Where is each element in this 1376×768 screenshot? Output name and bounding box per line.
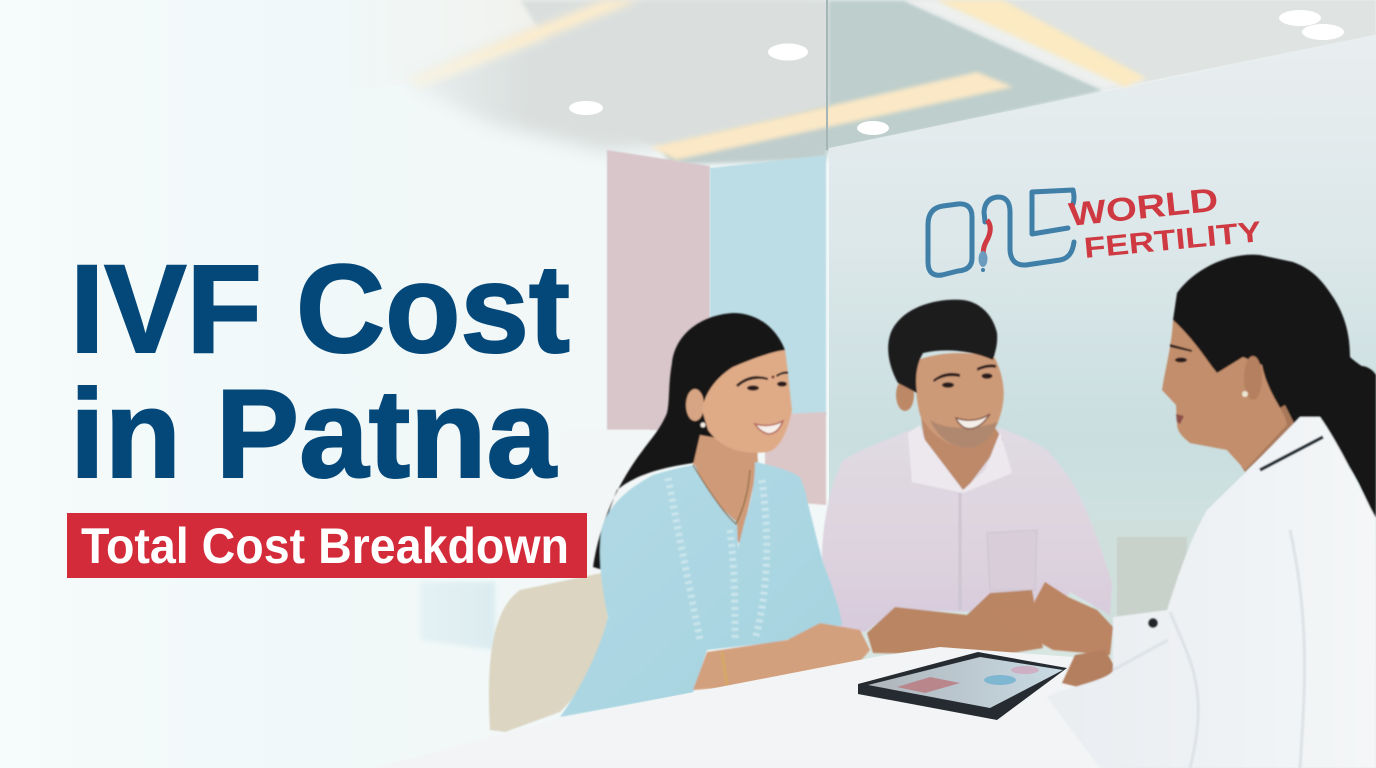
woman neck bbox=[693, 435, 758, 545]
doctor ear bbox=[1244, 356, 1262, 400]
doctor hair bbox=[1173, 255, 1376, 517]
doctor face bbox=[1162, 320, 1287, 470]
man forearms bbox=[867, 590, 1043, 655]
man face bbox=[916, 353, 1004, 448]
doctor eye bbox=[1170, 344, 1192, 362]
woman earring bbox=[700, 422, 706, 428]
woman smile bbox=[755, 421, 783, 434]
doctor lower hand bbox=[1062, 650, 1118, 690]
man ear bbox=[896, 379, 914, 411]
woman necklace bbox=[693, 465, 750, 524]
title: in Patna: in Patna bbox=[70, 365, 557, 504]
doctor mouth bbox=[1176, 414, 1184, 424]
logo icon: sperm and DNA bbox=[978, 220, 990, 272]
woman ear bbox=[686, 389, 704, 421]
doctor earring bbox=[1242, 391, 1248, 397]
man neck bbox=[920, 410, 1003, 493]
man beard shade bbox=[930, 420, 998, 448]
doctor neck bbox=[1225, 405, 1295, 472]
logo text: FERTILITY: FERTILITY bbox=[1083, 216, 1263, 265]
subtitle banner bbox=[67, 513, 587, 578]
man hair bbox=[888, 300, 997, 393]
doctor pen bbox=[1148, 618, 1158, 628]
doctor bbox=[988, 255, 1376, 768]
woman kurta embroidery bands bbox=[668, 478, 767, 640]
doctor coat folds bbox=[1113, 530, 1304, 768]
woman bracelet bbox=[722, 652, 727, 685]
woman bbox=[560, 313, 870, 717]
woman face bbox=[702, 350, 792, 453]
doctor white coat bbox=[1047, 417, 1376, 768]
logo text: WORLD: WORLD bbox=[1067, 180, 1220, 233]
logo: One World Fertility bbox=[928, 180, 1263, 275]
woman hair bbox=[593, 313, 785, 570]
woman kurta bbox=[560, 462, 842, 717]
man shirt bbox=[822, 428, 1112, 640]
left fade to white bbox=[0, 0, 530, 768]
stethoscope bbox=[1260, 437, 1323, 470]
man shirt pocket bbox=[987, 530, 1037, 590]
subtitle text: Total Cost Breakdown bbox=[81, 518, 569, 574]
tablet bbox=[858, 652, 1067, 720]
logo mark bbox=[928, 190, 1074, 275]
woman eyes, brows and bindi bbox=[736, 371, 788, 391]
woman arm and clasped hands bbox=[693, 623, 870, 690]
man smile bbox=[956, 414, 990, 429]
man eyes and brows bbox=[933, 364, 996, 388]
white table bbox=[375, 647, 1113, 768]
doctor ponytail bbox=[1339, 366, 1376, 518]
beige chair bbox=[489, 572, 610, 732]
title: IVF Cost: IVF Cost bbox=[70, 240, 570, 379]
man bbox=[822, 300, 1112, 655]
doctor gesturing hand bbox=[988, 582, 1113, 655]
man collar bbox=[908, 425, 1012, 493]
man shirt placket bbox=[958, 493, 962, 610]
